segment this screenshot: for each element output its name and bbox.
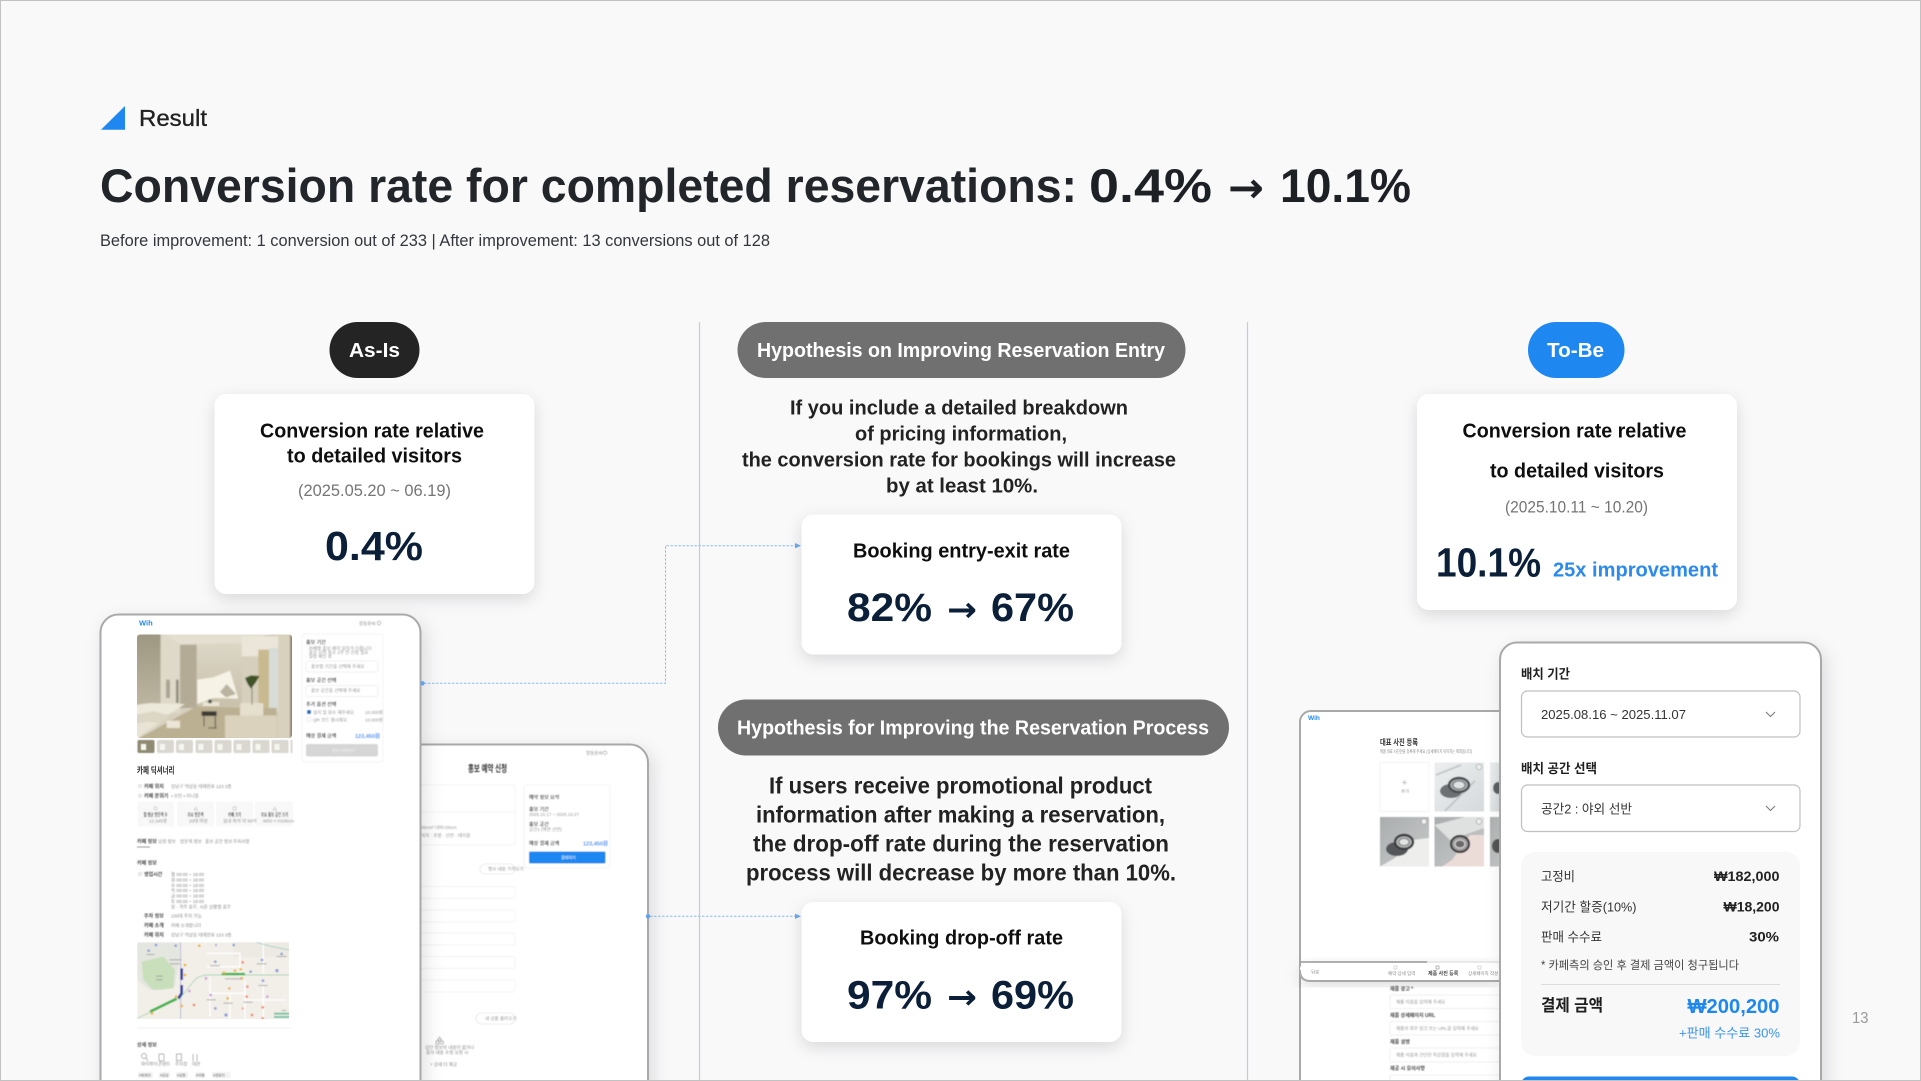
bottom step bar: 상세페이지 작성 (1468, 970, 1498, 977)
page content: 홍보 공간 (529, 821, 549, 828)
metric: 10.1% (1436, 540, 1541, 586)
connector dot: as-is page (420, 681, 425, 686)
label: space: 배치 공간 선택 (1521, 761, 1597, 776)
product form fields: 제품 이름과 간단한 특장점을 입력해 주세요 (1396, 1052, 1477, 1058)
booking sidebar (302, 634, 383, 762)
place information: 화 09:00 ~ 18:00 (171, 877, 205, 883)
place information: 100대 주차 가능 (171, 912, 202, 920)
metric: 0.4% (325, 523, 423, 569)
place information: 월 09:00 ~ 18:00 (171, 871, 205, 878)
page number: 13 (1852, 1010, 1869, 1027)
price summary: 고정비 (1541, 869, 1575, 884)
booking sidebar: 홍보 기간 (306, 639, 326, 646)
place information: 영업시간 (144, 871, 163, 878)
bottom step bar: 예약 상세 입력 (1388, 970, 1415, 977)
photo grid (1380, 762, 1504, 866)
map (137, 942, 289, 1020)
price summary: 결제 금액 (1541, 996, 1603, 1015)
booking sidebar: 예상 결제 금액 (306, 732, 337, 740)
title: 10.1% (1280, 159, 1411, 212)
detail info: 주차장 (175, 1060, 187, 1068)
column dividers (700, 322, 1248, 1081)
place information: 주의사항 (233, 838, 250, 845)
place information: ▪ 모던 ▪ 미니멀 (171, 792, 199, 800)
metric: 97% (847, 974, 932, 1018)
price summary: ₩18,200 (1724, 900, 1780, 914)
place information: 카페 정보 (137, 838, 157, 845)
page content: 예상 결제 금액 (529, 840, 560, 847)
page content: 예약 정보 요약 (529, 794, 560, 801)
title: Conversion rate for completed reservations: (100, 159, 1077, 212)
text block: process hypothesis: information after making a reservation, (756, 802, 1165, 828)
place information: 카페 분위기 (144, 792, 169, 800)
card heading: to detailed visitors (1490, 460, 1664, 482)
detail info: 와이파이 (141, 1060, 158, 1068)
price summary: * 카페측의 승인 후 결제 금액이 청구됩니다 (1541, 959, 1739, 972)
mockup: space detail page (as-is) (100, 614, 420, 1081)
detail info: #공원 (177, 1073, 186, 1078)
metric: 67% (991, 586, 1074, 630)
detail info: #겸퓨터 (213, 1073, 225, 1078)
booking sidebar: · 카페별 홍보 배치 일자가 다릅니다 (306, 645, 373, 652)
submit button (1521, 1076, 1800, 1081)
select: period (1522, 691, 1800, 737)
text block: entry hypothesis: If you include a detailed breakdown (790, 396, 1128, 420)
thumbnail strip (138, 740, 292, 753)
page content: 홍보 내용 수정 요청 시 (426, 1049, 468, 1056)
detail info: 대관 (192, 1060, 200, 1068)
connector arrow: as-is page to entry-exit card (424, 543, 801, 683)
price summary: 저기간 할증(10%) (1541, 900, 1636, 914)
title: → (1228, 163, 1264, 212)
booking sidebar: 홍보 공간 선택 (306, 677, 337, 684)
booking sidebar: · 일정 확인 후 (306, 653, 332, 660)
booking sidebar: 10,000원 (365, 716, 383, 722)
card heading: Booking entry-exit rate (853, 540, 1070, 562)
detail info: #화제의 (139, 1073, 151, 1078)
panel: to-be pill: To-Be (1547, 340, 1604, 362)
place information: 12,345명 (149, 818, 167, 824)
place information: 주차 정보 (144, 912, 164, 920)
card heading: Conversion rate relative (1462, 420, 1686, 442)
place information: 카페 위치 (144, 932, 164, 938)
product form fields: 제품 설명 (1390, 1038, 1410, 1046)
panel: as-is conversion card (214, 394, 534, 594)
panel: booking entry-exit card (802, 514, 1122, 654)
page content: 2025.10.17 ~ 2025.10.27 (529, 812, 580, 817)
booking sidebar: 홍보할 기간을 선택해 주세요 (311, 663, 364, 670)
bottom step bar: 뒤로 (1311, 968, 1319, 976)
panel: process hypothesis pill (718, 700, 1229, 756)
metric: 82% (847, 586, 932, 630)
page content: 결제하기 (561, 854, 576, 860)
subtitle: Before improvement: 1 conversion out of 233 | After improvement: 13 conversions out of 128 (100, 232, 770, 250)
page content: 홍보 예약 신청 (468, 763, 507, 775)
page content: 상단 정보의 내용이 없거나 (425, 1044, 474, 1051)
select: space: 공간2 : 야외 선반 (1541, 802, 1632, 816)
place information: 실내 좌석 약 50석 (223, 818, 257, 824)
product form fields: 제품 상세페이지 URL (1390, 1012, 1435, 1019)
text block: entry hypothesis: by at least 10%. (886, 474, 1038, 498)
text block: process hypothesis: the drop-off rate during the reservation (753, 830, 1169, 856)
panel: as-is pill (330, 322, 420, 378)
metric: 69% (991, 974, 1074, 1018)
text block: entry hypothesis: the conversion rate for bookings will increase (742, 448, 1176, 472)
select: period: 2025.08.16 ~ 2025.11.07 (1541, 707, 1686, 722)
connector arrow: booking page to drop-off card (650, 914, 801, 919)
page content: 홍보 기간 (529, 806, 549, 813)
booking sidebar: 홍보 신청하기 (332, 747, 356, 753)
panel: booking drop-off card (802, 902, 1122, 1042)
label: period: 배치 기간 (1521, 666, 1570, 682)
section name: Result (139, 105, 207, 131)
card heading: to detailed visitors (287, 446, 462, 468)
product form fields (1390, 986, 1510, 1081)
connector dot: booking page (646, 914, 650, 918)
place information: 카페 정보 (137, 860, 157, 866)
place information: 카페 크기 (228, 812, 241, 818)
header logo: Wih (139, 618, 153, 628)
place information: 강남구 역삼동 테헤란로 123 3층 (171, 783, 232, 790)
panel: to-be conversion card (1417, 394, 1737, 610)
place information: W50 × H100cm (263, 818, 294, 824)
price summary: 판매 수수료 (1541, 930, 1602, 944)
place information: 카페 위치 (144, 783, 164, 790)
page content: + 상세 더 제공 (430, 1061, 457, 1068)
page content: 의자 · 조명 · 선반 · 테이블 (421, 832, 470, 839)
place information: 20대 여성 (189, 818, 208, 824)
place information (137, 783, 294, 938)
detail info: #여행 (196, 1073, 205, 1078)
price summary: 30% (1749, 930, 1779, 944)
price summary (1521, 852, 1800, 1056)
product form fields: 제품의 외부 링크 또는 URL을 입력해 주세요 (1396, 1025, 1479, 1032)
price summary: +판매 수수료 30% (1679, 1026, 1780, 1040)
place information: 강남구 역삼동 테헤란로 123 3층 (171, 932, 232, 938)
place information: 수 09:00 ~ 18:00 (171, 883, 205, 889)
booking sidebar: 홍보 공간을 선택해 주세요 (311, 687, 360, 694)
bottom step bar: 제품 사진 등록 (1428, 970, 1459, 977)
place information: 상권 정보 (158, 838, 176, 844)
page content (400, 750, 610, 1068)
product form fields: 제품 이름을 입력해 주세요 (1396, 998, 1445, 1006)
place information: 일 · 격주 휴무, 시즌 상황별 휴무 (171, 903, 231, 910)
booking sidebar: 10,000원 (365, 709, 383, 715)
upload heading: 대표 사진 등록 (1380, 737, 1418, 747)
metric: → (947, 978, 977, 1018)
improvement note: 25x improvement (1553, 558, 1718, 582)
icon: blue triangle (101, 106, 125, 130)
panel: as-is pill: As-Is (349, 340, 400, 362)
mockup: photo upload page (to-be) (1298, 710, 1499, 1080)
page content: 장동윤씨 (586, 750, 603, 756)
section label: Result (101, 105, 207, 131)
photo: interior room (133, 631, 295, 741)
place information: 토 09:00 ~ 18:00 (171, 899, 205, 904)
place information: 주요 방문객 (188, 812, 204, 818)
title: 0.4% (1089, 159, 1212, 212)
panel: to-be pill (1528, 322, 1624, 378)
mockup: photo upload page (to-be): 제품 대표 사진만을 등록해 주세요 (상세페이지 이미지는 제외됩니다) (1380, 748, 1472, 755)
booking sidebar: QR 코드 챙시해요 (313, 716, 347, 724)
place title: 카페 딕셔너리 (137, 764, 174, 776)
place information: 카페 소개 (144, 922, 164, 929)
page content: 행사 내용 가져오기 (488, 866, 524, 872)
place information: 월 평균 방문객 수 (144, 812, 168, 818)
date range: (2025.05.20 ~ 06.19) (298, 482, 451, 500)
detail info (137, 1028, 292, 1078)
photo grid: 추가 (1401, 788, 1409, 795)
mockup: booking request page (as-is) (380, 744, 648, 1081)
date range: (2025.10.11 ~ 10.20) (1505, 498, 1648, 516)
mockup: space detail page (as-is): 장동윤씨 (359, 620, 376, 626)
text block: process hypothesis: process will decrease by more than 10%. (746, 860, 1176, 886)
place information: 카페 소개합니다 (171, 922, 202, 929)
detail info: #감성 (160, 1073, 169, 1078)
select: space (1522, 785, 1800, 832)
page content: 123,450원 (583, 840, 608, 848)
place information: 방문객 정보 (180, 838, 202, 845)
panel: entry hypothesis pill: Hypothesis on Improving Reservation Entry (757, 340, 1166, 362)
place information: 홍보 공간 정보 (205, 838, 232, 844)
detail info: 콘센트 (158, 1060, 170, 1066)
detail info: 상세 정보 (137, 1042, 157, 1048)
product form fields: 제품 광고 * (1390, 986, 1413, 992)
page content: 공간1 (벽면 선반) (529, 826, 562, 833)
page content: 내 상품 불러오기 (485, 1015, 516, 1022)
text block: process hypothesis: If users receive promotional product (769, 772, 1152, 798)
panel: payment form (to-be) (1500, 642, 1821, 1081)
price summary: ₩182,000 (1714, 869, 1780, 884)
panel: process hypothesis pill: Hypothesis for Improving the Reservation Process (737, 718, 1209, 740)
card heading: Booking drop-off rate (860, 928, 1063, 950)
price summary: ₩200,200 (1688, 996, 1780, 1018)
place information: 주요 홍보 공간 크기 (261, 812, 288, 818)
bottom step bar (1300, 962, 1500, 982)
text block: entry hypothesis: of pricing information, (855, 422, 1067, 446)
booking sidebar: 추가 옵션 선택 (306, 701, 337, 708)
page content: 50cm² 너비×20cm (421, 824, 457, 831)
place information: 목 09:00 ~ 18:00 (171, 888, 205, 894)
place information: 금 09:00 ~ 18:00 (171, 894, 205, 899)
booking sidebar: · 홍보 시작 최소 2주 전 신청 필요 (306, 649, 368, 656)
booking sidebar: 설치 및 회수 해주세요 (313, 709, 354, 716)
metric: → (947, 590, 977, 630)
booking sidebar: 123,450원 (355, 732, 380, 740)
panel: entry hypothesis pill (738, 322, 1186, 378)
logo: Wih (1308, 715, 1320, 722)
product form fields: 제공 시 유의사항 (1390, 1065, 1425, 1072)
card heading: Conversion rate relative (260, 420, 484, 442)
